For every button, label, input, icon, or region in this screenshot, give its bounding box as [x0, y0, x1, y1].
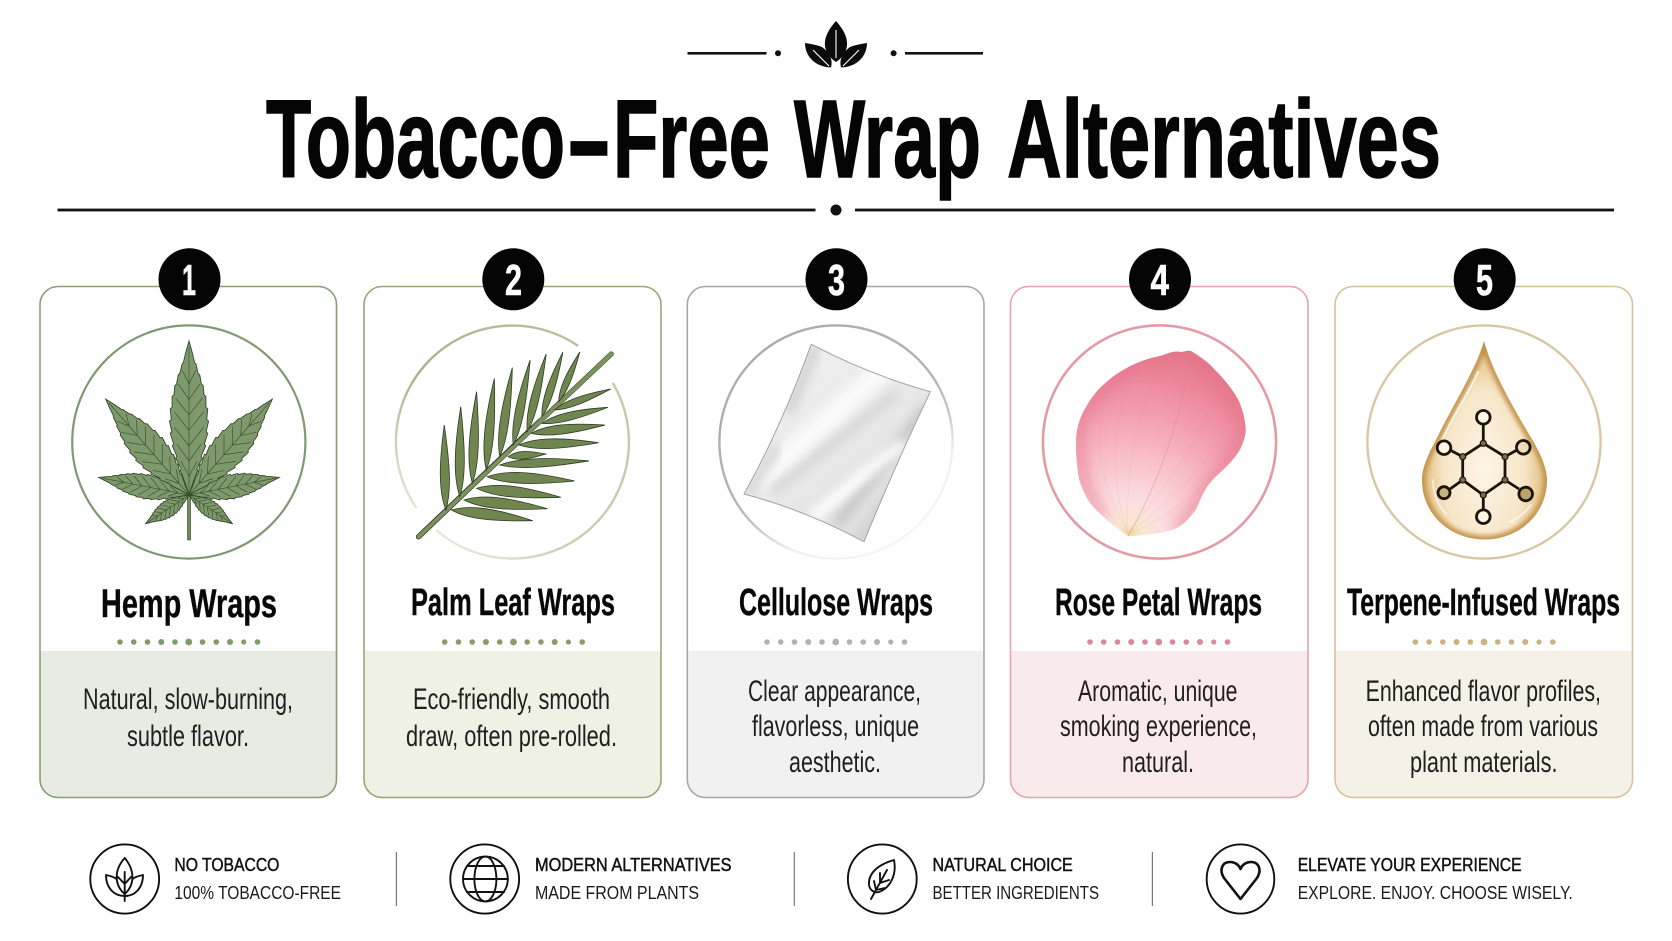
- description: Eco-friendly, smooth: [413, 683, 610, 716]
- panel: rose petal wraps: [1010, 248, 1308, 798]
- heading: rose petal wraps: Rose Petal Wraps: [1055, 582, 1262, 624]
- icon: rose petal: [1076, 351, 1246, 536]
- footer item: modern alternatives: [450, 844, 732, 914]
- text: [535, 855, 732, 903]
- image circle: [1367, 325, 1601, 559]
- description: aesthetic.: [789, 746, 881, 779]
- text: [932, 855, 1099, 903]
- number badge 3: 3: [828, 256, 845, 305]
- text: NO TOBACCO: [174, 855, 279, 875]
- text: NATURAL CHOICE: [932, 855, 1073, 875]
- text: [174, 855, 341, 903]
- icon: cellulose film: [744, 344, 930, 542]
- dotted separator: [1087, 639, 1230, 645]
- description: [1366, 675, 1601, 779]
- dotted separator: [442, 639, 585, 645]
- description: subtle flavor.: [127, 720, 249, 753]
- description: [83, 683, 293, 753]
- image circle arcs: [396, 326, 629, 559]
- description: Aromatic, unique: [1078, 675, 1238, 708]
- number badge 5: [1454, 248, 1516, 310]
- description: plant materials.: [1410, 746, 1558, 779]
- number badge 2: [482, 248, 544, 310]
- description: flavorless, unique: [752, 710, 919, 743]
- icon: leaf in circle: [848, 844, 917, 914]
- text: BETTER INGREDIENTS: [932, 883, 1099, 903]
- footer item: natural choice: [848, 844, 1099, 914]
- title: Alternatives: [1007, 78, 1441, 201]
- title: -: [566, 78, 612, 201]
- number badge 4: 4: [1150, 256, 1169, 305]
- text: ELEVATE YOUR EXPERIENCE: [1298, 855, 1522, 875]
- number badge 1: 1: [182, 256, 196, 305]
- number badge 5: 5: [1476, 256, 1493, 305]
- card background: [364, 286, 661, 798]
- card background: [687, 286, 984, 798]
- description: draw, often pre-rolled.: [406, 720, 617, 753]
- title: Wrap: [794, 78, 981, 201]
- icon: hemp leaf: [92, 341, 286, 540]
- title divider: [58, 204, 1614, 216]
- icon: globe in circle: [450, 844, 519, 914]
- description: Natural, slow-burning,: [83, 683, 293, 716]
- dotted separator: [117, 639, 260, 645]
- image circle: [1043, 325, 1276, 559]
- number badge 3: [806, 248, 868, 310]
- number badge 2: 2: [505, 256, 522, 305]
- panel: cellulose wraps: [687, 248, 984, 798]
- panel: hemp wraps: [40, 248, 336, 798]
- heading: cellulose wraps: Cellulose Wraps: [739, 582, 933, 624]
- text: [1298, 855, 1573, 903]
- description: natural.: [1122, 746, 1194, 779]
- image circle: [72, 325, 305, 559]
- footer item: elevate your experience: [1207, 844, 1573, 914]
- dotted separator: [1412, 639, 1556, 645]
- image circle: [719, 325, 953, 559]
- description: [1060, 675, 1257, 779]
- title: Free: [613, 78, 770, 201]
- header ornament: leaves with lines: [688, 21, 983, 68]
- icon: leaves in circle: [90, 844, 159, 914]
- title: Tobacco: [266, 78, 565, 201]
- icon: heart in circle: [1207, 844, 1274, 914]
- dotted separator: [764, 639, 907, 645]
- number badge 4: [1129, 248, 1191, 310]
- description: Clear appearance,: [748, 675, 921, 708]
- heading: hemp wraps: Hemp Wraps: [101, 582, 277, 626]
- text: 100% TOBACCO-FREE: [174, 883, 341, 903]
- description: [406, 683, 617, 753]
- footer item: no tobacco: [90, 844, 341, 914]
- description: [748, 675, 921, 779]
- description: smoking experience,: [1060, 710, 1257, 743]
- heading: palm leaf wraps: Palm Leaf Wraps: [411, 582, 615, 624]
- panel: terpene-infused wraps: [1335, 248, 1632, 798]
- card background: [1335, 286, 1632, 798]
- icon: palm leaf: [419, 351, 612, 537]
- icon: terpene drop with molecule: [1422, 341, 1547, 540]
- number badge 1: [158, 248, 220, 310]
- panel: palm leaf wraps: [364, 248, 661, 798]
- card background: [1010, 286, 1308, 798]
- text: MODERN ALTERNATIVES: [535, 855, 732, 875]
- text: EXPLORE. ENJOY. CHOOSE WISELY.: [1298, 883, 1573, 903]
- text: MADE FROM PLANTS: [535, 883, 699, 903]
- card background: [40, 286, 336, 798]
